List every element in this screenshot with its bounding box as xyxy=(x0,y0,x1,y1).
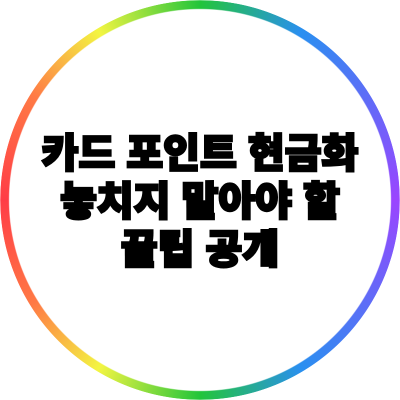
title: 놓치지 말아야 할 xyxy=(60,180,340,224)
title xyxy=(40,132,359,272)
title: 꿀팁 공개 xyxy=(121,228,279,272)
title: 카드 포인트 현금화 xyxy=(42,132,358,176)
